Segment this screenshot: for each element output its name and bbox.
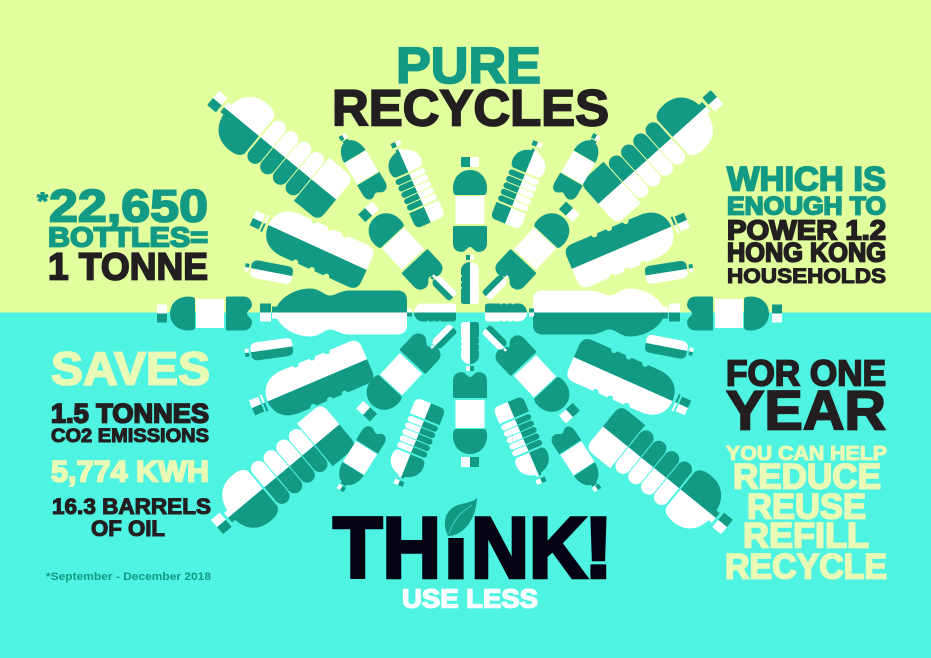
bottle: narrow ribbed bottom-left [382, 397, 447, 491]
line: for one: FOR ONE [726, 352, 886, 394]
bottle: wide upper-right [563, 199, 696, 290]
stat: 16.3 barrels: 16.3 BARRELS [52, 494, 211, 519]
exclamation mark: ! [584, 500, 613, 596]
bottle: banded diagonal bottom-right [492, 332, 586, 429]
bottle: slim top-right [551, 128, 608, 202]
text block: you can help [725, 443, 887, 586]
letters: TH: TH [333, 500, 441, 596]
line: hong kong: HONG KONG [727, 238, 886, 268]
slogan: use less: USE LESS [402, 584, 538, 614]
stat: 1.5 tonnes: 1.5 TONNES [51, 398, 209, 428]
asterisk: * [37, 188, 49, 215]
bottle: small capsule lower-left [244, 337, 294, 362]
bottle: banded outer right [687, 296, 782, 330]
bottle: narrow ribbed bottom-right [492, 395, 558, 490]
footnote: *September - December 2018 [46, 571, 211, 583]
bottle: wide lower-left [243, 338, 376, 429]
line: recycle: RECYCLE [725, 548, 887, 586]
text block: power households [727, 160, 886, 288]
bottle: wavy horizontal right [533, 288, 680, 336]
bottle: banded bottom [453, 372, 487, 467]
bottle: small capsule upper-right [644, 259, 694, 284]
bottle: large ribbed top-right [578, 75, 737, 226]
bottle: small capsule lower-right [644, 334, 695, 361]
bottle: inner diagonal bottom-right [482, 325, 511, 354]
stat label: of oil: OF OIL [91, 516, 165, 541]
stat label: co2 emissions: CO2 EMISSIONS [51, 426, 209, 447]
title [332, 37, 609, 136]
title line: PURE: PURE [396, 37, 541, 94]
bottle: slim top-left [331, 128, 389, 202]
line: reuse: REUSE [747, 488, 866, 526]
bottle: large ribbed top-left [194, 75, 355, 223]
line: households: HOUSEHOLDS [727, 265, 886, 288]
bottle: banded outer left [157, 296, 252, 330]
letters: NK: NK [471, 500, 587, 596]
bottle: slim bottom-left [329, 424, 388, 497]
bottle: large ribbed bottom-right [584, 403, 746, 550]
line: enough to: ENOUGH TO [727, 192, 886, 220]
bottle: wavy horizontal left [260, 288, 407, 336]
bottle: narrow ribbed top-right [489, 136, 554, 230]
slogan: think [332, 498, 607, 580]
bottle: inner top [461, 255, 479, 304]
text block: for one year [726, 352, 886, 442]
bottle: banded diagonal top-right [492, 196, 586, 293]
label: bottles: BOTTLES= [48, 222, 208, 252]
line: power 1.2: POWER 1.2 [727, 214, 886, 246]
bottle: inner diagonal top-right [482, 271, 511, 300]
bottle: banded diagonal bottom-left [350, 330, 444, 427]
bottle: small capsule upper-left [243, 258, 294, 285]
background: pale yellow upper half [0, 0, 931, 312]
bottle: inner left [407, 304, 456, 322]
bottle: banded diagonal top-left [352, 196, 446, 293]
bottle: wide upper-left [243, 197, 376, 291]
title line: RECYCLES: RECYCLES [332, 80, 609, 136]
background: turquoise lower half [0, 312, 931, 658]
bottle: inner diagonal bottom-left [428, 324, 457, 353]
letter: i: i [444, 500, 468, 596]
icon: leaf [445, 498, 477, 536]
line: reduce: REDUCE [733, 458, 881, 496]
line: year: YEAR [726, 378, 886, 442]
stat: 5,774 kwh: 5,774 KWH [51, 456, 209, 488]
text block: savings [51, 342, 211, 541]
bottle: narrow ribbed top-left [379, 135, 446, 229]
radial burst of plastic bottles [157, 75, 782, 550]
bottle: large ribbed bottom-left [198, 401, 358, 550]
bottle: inner diagonal top-left [428, 272, 457, 301]
bottle: inner right [485, 304, 534, 322]
text block: bottles per tonne [37, 180, 208, 288]
line: which is: WHICH IS [727, 160, 886, 198]
heading: saves: SAVES [51, 342, 210, 394]
bottle: banded top [453, 157, 487, 252]
bottle: inner bottom [461, 322, 479, 371]
label: one tonne: 1 TONNE [48, 246, 208, 288]
number: 22,650: 22,650 [49, 180, 208, 232]
line: you can help: YOU CAN HELP [726, 443, 887, 465]
bottle: wide lower-right [564, 336, 697, 429]
line: refill: REFILL [743, 516, 869, 556]
bottle: slim bottom-right [549, 424, 609, 497]
